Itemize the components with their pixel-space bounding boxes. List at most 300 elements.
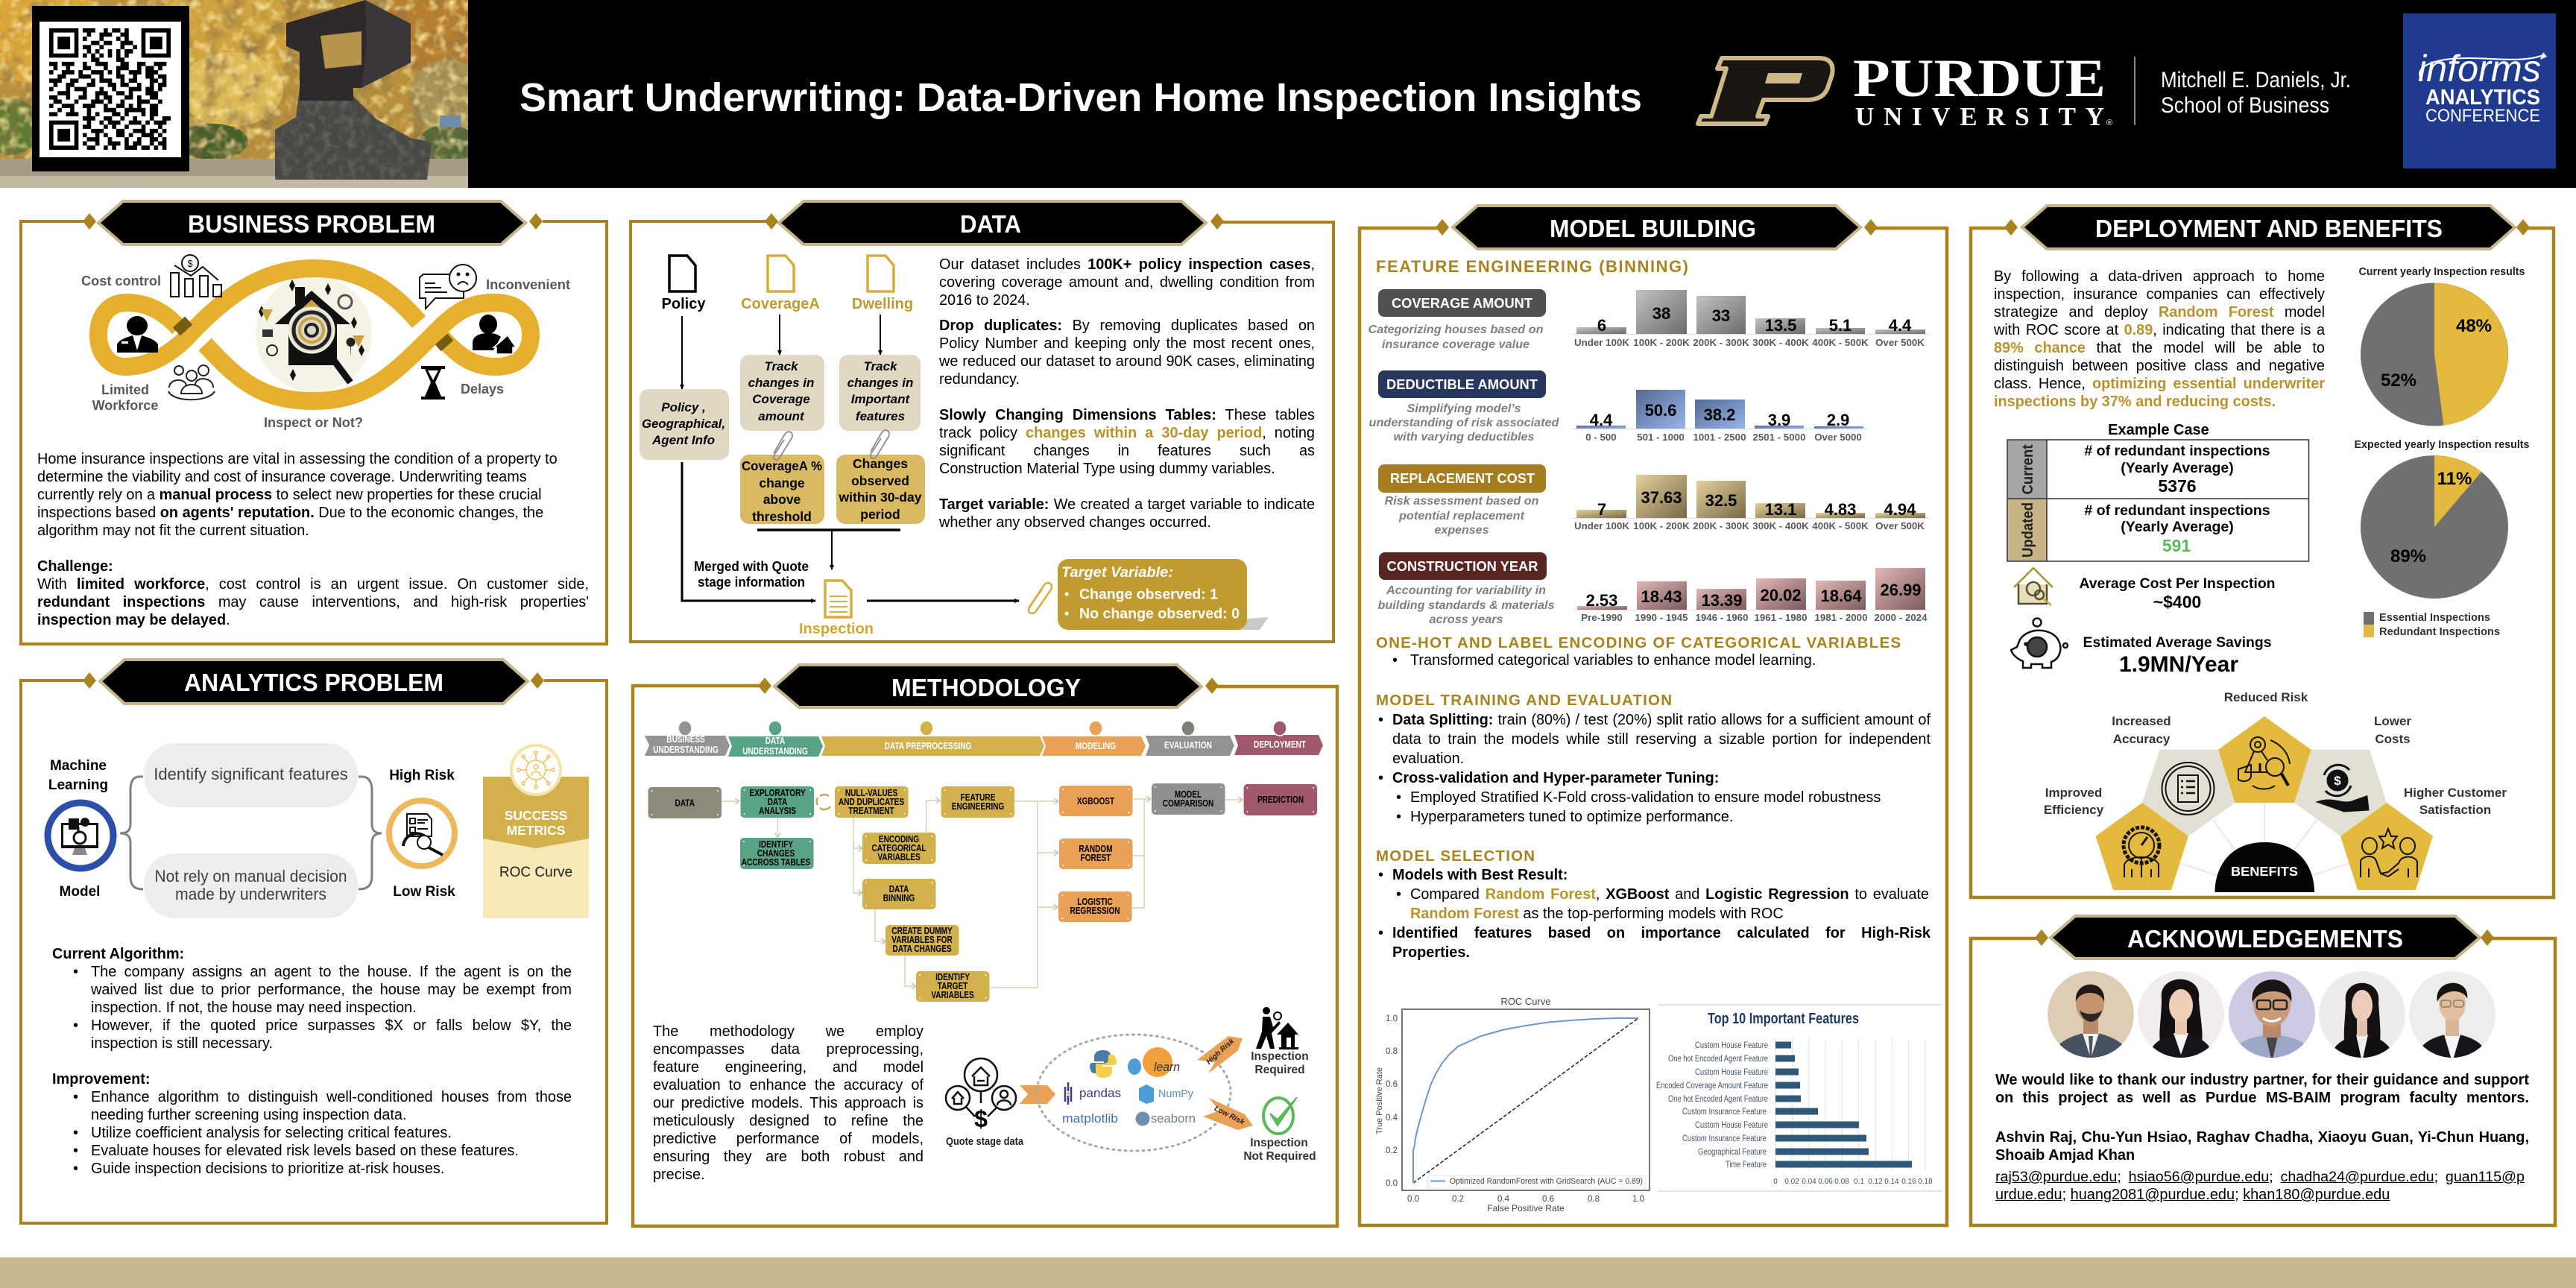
bar chart: construction year: 18.43	[1641, 587, 1682, 606]
icon: person with house	[473, 315, 516, 354]
benefit labels: Improved	[2045, 786, 2102, 800]
cost per inspection: ~$400	[2153, 592, 2201, 611]
QR code	[32, 6, 189, 171]
bar chart: coverage amount: 38	[1652, 304, 1670, 323]
authors: Shoaib Amjad Khan	[1995, 1147, 2135, 1164]
left brace	[120, 777, 143, 889]
bar chart: replacement cost: 7	[1597, 500, 1606, 519]
bar chart: replacement cost: 100K - 200K	[1633, 520, 1690, 531]
box: exploratory data analysis: EXPLORATORY	[749, 789, 806, 798]
deployment text: By following a data-driven approach to home	[1994, 268, 2325, 285]
box: identify changes: CHANGES	[757, 849, 795, 859]
portrait 4	[2319, 971, 2405, 1062]
current algorithm and improvement text: waived list due to prior performance, the house may be exempt from	[91, 982, 572, 998]
ROC curve chart: True Positive Rate	[1375, 1067, 1384, 1134]
bar chart: coverage amount: 400K - 500K	[1812, 337, 1869, 348]
panel: model building	[1360, 206, 1947, 1225]
icon: increased accuracy	[2162, 763, 2214, 815]
flow labels: Dwelling	[852, 296, 913, 312]
process phase chevrons: MODELING	[1076, 742, 1116, 751]
bar chart: coverage amount: 6	[1597, 316, 1606, 335]
bar chart: construction year: 1946 - 1960	[1696, 612, 1748, 623]
business problem text: currently rely on a manual process to select new properties for these crucial	[37, 487, 542, 503]
slowly changing dimensions text: Construction Material Type using dummy variables.	[939, 461, 1275, 477]
icon: cost chart	[171, 255, 221, 297]
example case table: 591	[2162, 536, 2191, 555]
heading: methodology: METHODOLOGY	[891, 674, 1081, 701]
box: encoding categorical variables: CATEGORICAL	[871, 844, 926, 853]
ROC curve chart: 0.0	[1407, 1195, 1419, 1204]
drop duplicates text	[939, 317, 1316, 391]
model selection text: Random Forest as the top-performing models with ROC	[1410, 906, 1784, 922]
bar chart: deductible amount: 0 - 500	[1585, 432, 1617, 443]
box: feature engineering: ENGINEERING	[952, 802, 1004, 812]
methodology text: ensuring they are both robust and	[653, 1149, 924, 1165]
heading: business problem	[83, 201, 543, 244]
deployment text: 89% chance that the model will be able to	[1994, 340, 2325, 356]
box: identify target variables: TARGET	[938, 982, 967, 991]
methodology text: predictive performance of models,	[653, 1131, 924, 1147]
icon: lower costs: $	[2334, 774, 2341, 788]
slowly changing dimensions text: track policy changes within a 30-day period, noting	[939, 425, 1315, 441]
success metrics card: METRICS	[507, 823, 565, 838]
feature importance bar chart: 0.04	[1802, 1178, 1816, 1186]
icon: executive	[117, 316, 158, 353]
current algorithm and improvement text: inspection is still necessary.	[91, 1035, 273, 1052]
ROC curve chart: 0.4	[1497, 1195, 1510, 1204]
bar chart: construction year: 1961 - 1980	[1755, 612, 1807, 623]
portrait 2	[2138, 971, 2224, 1062]
bar chart: construction year: 26.99	[1880, 581, 1922, 599]
box: create dummy variables: CREATE DUMMY	[891, 926, 953, 936]
risk output block	[389, 768, 455, 900]
bar chart: deductible amount: 2501 - 5000	[1753, 432, 1805, 443]
box: identify target variables: VARIABLES	[931, 991, 974, 1000]
pie chart: current results	[2358, 266, 2525, 426]
statue rock base	[275, 88, 432, 180]
business problem text: inspection may be delayed.	[37, 612, 230, 628]
INFORMS conference logo: ANALYTICS	[2425, 86, 2540, 110]
business problem text: inspections based on agents' reputation. Due to the economic changes, the	[37, 505, 543, 521]
box: identify changes: IDENTIFY	[759, 840, 793, 850]
model training text: Employed Stratified K-Fold cross-validation to ensure model robustness	[1410, 789, 1881, 806]
feature importance bar chart: Encoded Coverage Amount Feature	[1656, 1082, 1768, 1090]
bin group: replacement cost: Risk assessment based on	[1385, 495, 1539, 508]
target variable text: Target variable: We created a target variable to indicate	[939, 496, 1315, 513]
bin group: replacement cost: REPLACEMENT COST	[1390, 471, 1535, 486]
machine learning model block	[48, 758, 113, 900]
box: changes observed: Changes	[853, 456, 908, 471]
current algorithm and improvement text: Utilize coefficient analysis for selecting critical features.	[91, 1125, 452, 1141]
flow labels: Policy	[662, 296, 706, 312]
box: xgboost	[1059, 786, 1133, 816]
feature importance bar chart: 0.16	[1901, 1178, 1916, 1186]
heading: data: DATA	[960, 210, 1021, 238]
bar chart: coverage amount	[1572, 290, 1930, 348]
process phase chevrons: UNDERSTANDING	[742, 747, 808, 757]
flow labels	[662, 296, 913, 312]
infinity ribbon diagram	[81, 255, 570, 430]
example case table: # of redundant inspections	[2084, 443, 2270, 459]
methodology text: our predictive models. This approach is	[653, 1095, 924, 1111]
target variable text	[939, 496, 1316, 533]
footer band	[0, 1257, 2576, 1288]
icon: scikit-learn	[1128, 1047, 1180, 1077]
risk output block: High Risk	[389, 768, 455, 783]
methodology text: precise.	[653, 1167, 705, 1183]
icon: cost chart: $	[187, 258, 193, 269]
benefit labels: Higher Customer	[2404, 786, 2507, 800]
estimated savings: Estimated Average Savings	[2083, 634, 2272, 651]
icon: improved efficiency	[2124, 827, 2159, 877]
current algorithm and improvement text: •	[73, 1125, 78, 1141]
model training text: data to train the models while still reserving a sizable portion for independent	[1392, 731, 1931, 748]
heading: deployment and benefits	[2004, 206, 2530, 249]
process phase chevrons: BUSINESS	[666, 735, 705, 745]
benefit labels: Costs	[2375, 732, 2411, 746]
bin group: construction year: Accounting for variability in	[1386, 584, 1546, 597]
icon: piggy bank	[2011, 619, 2068, 668]
icon: house with magnifier	[2014, 568, 2053, 605]
model training text: Data Splitting: train (80%) / test (20%) split ratio allows for a sufficient amount of	[1392, 712, 1931, 728]
box: data binning: BINNING	[883, 894, 915, 903]
box: track features	[839, 355, 921, 431]
team portraits	[2048, 971, 2496, 1062]
Purdue University wordmark: ®	[2106, 119, 2112, 127]
icon: lower costs	[2319, 765, 2368, 811]
box: random forest: RANDOM	[1079, 845, 1113, 854]
feature importance bar chart: 0	[1773, 1178, 1778, 1186]
drop duplicates text: redundancy.	[939, 371, 1020, 388]
INFORMS conference logo: CONFERENCE	[2425, 106, 2540, 126]
icon: inspection required	[1251, 1007, 1309, 1076]
deployment text: strategize and deploy Random Forest model	[1994, 304, 2325, 321]
ROC curve chart: 0.8	[1588, 1195, 1600, 1204]
model selection text: •	[1396, 886, 1401, 903]
panel: business problem	[21, 201, 607, 644]
bin group: coverage amount: insurance coverage value	[1382, 338, 1530, 351]
bar chart: construction year: 2.53	[1586, 591, 1617, 610]
process flow connectors	[722, 799, 1243, 988]
thanks text: We would like to thank our industry partner, for their guidance and support	[1995, 1072, 2529, 1088]
slowly changing dimensions text: significant changes in features such as	[939, 443, 1315, 459]
box: changes observed: period	[860, 507, 900, 522]
bin group: construction year: building standards & materials	[1377, 599, 1555, 612]
bin group: replacement cost	[1378, 464, 1930, 537]
arrow: high risk: High Risk	[1205, 1037, 1236, 1067]
bar chart: replacement cost: 37.63	[1641, 488, 1682, 507]
heading: analytics problem: ANALYTICS PROBLEM	[184, 669, 443, 696]
heading: acknowledgements: ACKNOWLEDGEMENTS	[2127, 925, 2403, 953]
example case table	[2007, 440, 2309, 561]
feature importance bar chart: Time Feature	[1726, 1161, 1767, 1169]
ROC curve chart: 1.0	[1386, 1014, 1398, 1023]
pie chart: expected results: 89%	[2390, 546, 2426, 566]
ROC curve chart: 0.2	[1386, 1146, 1398, 1155]
box: track coverage	[740, 355, 824, 431]
success metrics card: SUCCESS	[505, 808, 567, 823]
deployment text: inspection, insurance companies can effectively	[1994, 286, 2325, 303]
box: null values treatment: NULL-VALUES	[845, 789, 898, 798]
ROC curve chart: ROC Curve	[1500, 996, 1551, 1007]
icon: inspection document: Inspection	[799, 621, 874, 637]
icon: gold paperclip	[1029, 583, 1052, 613]
panel: analytics problem	[21, 660, 607, 1223]
benefits diagram	[2044, 690, 2507, 892]
model selection text: Compared Random Forest, XGBoost and Logistic Regression to evaluate	[1410, 886, 1929, 903]
model training text: Hyperparameters tuned to optimize performance.	[1410, 809, 1733, 825]
success metrics card: ROC Curve	[499, 865, 572, 880]
campus photo with P statue	[0, 0, 499, 188]
issue labels: Inspect or Not?	[264, 415, 363, 430]
arrow: low risk	[1203, 1098, 1253, 1130]
bar chart: deductible amount: 501 - 1000	[1637, 432, 1685, 443]
box: create dummy variables: DATA CHANGES	[892, 944, 952, 954]
deployment text: inspections by 37% and reducing costs.	[1994, 394, 2276, 410]
pill: not rely on manual decision	[144, 853, 358, 918]
box: logistic regression	[1058, 891, 1131, 922]
bar chart: coverage amount: 5.1	[1829, 316, 1852, 335]
business problem text: With limited workforce, cost control is an urgent issue. On customer side,	[37, 576, 589, 593]
deployment text: with ROC score at 0.89, indicating that there is a	[1994, 322, 2325, 338]
section heading: feature engineering: FEATURE ENGINEERING (BINNING)	[1376, 257, 1688, 276]
ROC curve chart: 0.4	[1386, 1114, 1398, 1123]
current algorithm and improvement text: •	[73, 1017, 78, 1034]
merged note: Merged with Quote	[694, 559, 809, 574]
icon: workforce	[168, 365, 215, 400]
model training text: •	[1396, 809, 1401, 825]
seaborn logo: seaborn	[1151, 1111, 1196, 1126]
box: data binning	[862, 879, 936, 909]
box: create dummy variables: VARIABLES FOR	[891, 935, 953, 945]
process phase chevrons: DEPLOYMENT	[1254, 740, 1306, 750]
box: random forest: FOREST	[1081, 853, 1111, 863]
ROC curve chart	[1375, 996, 1650, 1213]
box: track coverage: Coverage	[752, 392, 810, 406]
bar chart: coverage amount: 13.5	[1765, 316, 1796, 335]
bar chart: replacement cost: 32.5	[1705, 491, 1737, 510]
pandas logo	[1065, 1082, 1121, 1105]
right brace	[359, 777, 382, 889]
data description text: 2016 to 2024.	[939, 292, 1030, 309]
machine learning model block: Machine	[50, 758, 107, 774]
icon: scikit-learn: learn	[1154, 1060, 1180, 1074]
benefits diagram: BENEFITS	[2231, 864, 2298, 879]
estimated savings	[2011, 619, 2272, 677]
process phase chevrons	[645, 721, 1323, 757]
INFORMS conference logo: informs	[2418, 48, 2541, 89]
process phase chevrons: DATA PREPROCESSING	[885, 742, 971, 751]
arrow: high risk	[1197, 1036, 1243, 1073]
issue labels: Workforce	[92, 398, 158, 413]
feature importance bar chart: Custom Insurance Feature	[1682, 1108, 1767, 1117]
bar chart: deductible amount: 1001 - 2500	[1693, 432, 1746, 443]
encoding text	[1392, 651, 1914, 671]
heading: deployment and benefits: DEPLOYMENT AND BENEFITS	[2095, 215, 2443, 242]
box: identify target variables: IDENTIFY	[935, 973, 970, 982]
model training text: •	[1378, 712, 1383, 728]
current algorithm and improvement text: •	[73, 964, 78, 980]
current algorithm and improvement text: inspection. If not, the house may need inspection.	[91, 1000, 417, 1016]
box: data: DATA	[675, 799, 695, 809]
bar chart: replacement cost	[1572, 475, 1930, 531]
pill: identify significant features	[144, 743, 358, 807]
numpy logo: NumPy	[1158, 1087, 1193, 1100]
icon: inspection not required: Inspection	[1250, 1137, 1308, 1149]
pie chart: expected results: Expected yearly Inspection results	[2354, 439, 2530, 451]
bar chart: deductible amount: 4.4	[1590, 411, 1613, 429]
box: logistic regression: LOGISTIC	[1077, 897, 1113, 907]
feature importance bar chart	[1656, 1005, 1942, 1191]
ROC curve chart: 0.6	[1386, 1080, 1398, 1089]
bin group: replacement cost: potential replacement	[1398, 510, 1525, 523]
business problem text: redundant inspections may cause interventions, and high-risk properties'	[37, 594, 589, 610]
bar chart: deductible amount: 2.9	[1827, 411, 1849, 429]
box: changes observed	[836, 455, 925, 524]
ROC curve chart: 0.0	[1386, 1179, 1398, 1188]
current algorithm and improvement text: Evaluate houses for elevated risk levels based on these features.	[91, 1143, 519, 1159]
feature importance bar chart: Top 10 Important Features	[1708, 1011, 1859, 1027]
box: policy info: Geographical,	[642, 417, 725, 431]
deployment text: class. Hence, optimizing essential underwriter	[1994, 376, 2325, 392]
risk output block: Low Risk	[393, 884, 455, 900]
deployment text	[1994, 268, 2326, 417]
statue letter P	[286, 0, 411, 101]
machine learning model block: Model	[60, 884, 100, 900]
bar chart: construction year: 18.64	[1820, 587, 1862, 605]
merged note	[694, 559, 809, 590]
process flow boxes	[648, 783, 1317, 1002]
example case table: (Yearly Average)	[2121, 460, 2234, 476]
box: coverage change: threshold	[752, 509, 812, 524]
section heading: model training: MODEL TRAINING AND EVALUATION	[1376, 692, 1672, 709]
icon: hourglass	[421, 366, 445, 400]
icon: paperclips	[774, 430, 889, 460]
model selection text: •	[1378, 925, 1383, 941]
cost per inspection: Average Cost Per Inspection	[2080, 575, 2275, 592]
box: model comparison: MODEL	[1175, 790, 1202, 800]
business problem text: Challenge:	[37, 558, 113, 575]
model selection text	[1376, 865, 1935, 965]
heading: methodology	[758, 665, 1219, 707]
icon: quote stage data: Quote stage data	[946, 1135, 1024, 1148]
model training text: •	[1396, 789, 1401, 806]
example case table: Current	[2020, 444, 2036, 495]
icon: python	[1090, 1050, 1117, 1078]
target variable text: whether any observed changes occurred.	[939, 514, 1211, 531]
model training text: •	[1378, 770, 1383, 786]
box: null values treatment: TREATMENT	[848, 806, 894, 816]
box: encoding categorical variables: VARIABLES	[877, 853, 921, 862]
current algorithm and improvement text: However, if the quoted price surpasses $X or falls below $Y, the	[91, 1017, 572, 1034]
target variable callout	[1058, 559, 1269, 630]
bar chart: coverage amount: 200K - 300K	[1693, 337, 1749, 348]
emails	[1995, 1168, 2532, 1205]
benefit labels: Increased	[2112, 714, 2171, 728]
numpy logo	[1139, 1085, 1193, 1104]
icon: unhappy feedback	[420, 265, 476, 309]
current algorithm and improvement text: Enhance algorithm to distinguish well-conditioned houses from those	[91, 1089, 572, 1105]
bar chart: replacement cost: 4.83	[1825, 500, 1856, 519]
machine learning model block: Learning	[48, 777, 108, 793]
bar chart: deductible amount: 3.9	[1768, 411, 1790, 429]
drop duplicates text: Drop duplicates: By removing duplicates based on	[939, 318, 1315, 334]
target variable callout: Change observed: 1	[1079, 587, 1218, 602]
process phase chevrons: EVALUATION	[1164, 741, 1212, 751]
feature importance bar chart: 0.18	[1918, 1178, 1933, 1186]
model training text	[1376, 710, 1935, 830]
box: model comparison: COMPARISON	[1163, 799, 1213, 809]
box: identify target variables	[916, 971, 990, 1002]
box: feature engineering	[941, 786, 1014, 818]
pie chart: current results: 48%	[2456, 316, 2492, 336]
pie legend	[2364, 612, 2500, 638]
benefit labels	[2044, 690, 2507, 817]
estimated savings: 1.9MN/Year	[2119, 652, 2238, 677]
icon: policy document	[669, 256, 695, 291]
pie legend: Essential Inspections	[2379, 612, 2490, 624]
methodology text	[653, 1023, 925, 1187]
box: coverage change: above	[763, 492, 801, 507]
bin group: replacement cost: expenses	[1435, 524, 1489, 537]
benefit labels: Efficiency	[2044, 803, 2104, 817]
school name	[2161, 68, 2351, 118]
section heading: model selection: MODEL SELECTION	[1376, 847, 1535, 865]
bar chart: replacement cost: 300K - 400K	[1752, 520, 1809, 531]
success metrics card	[483, 745, 589, 918]
bar chart: coverage amount: Over 500K	[1875, 337, 1925, 348]
title: Smart Underwriting: Data-Driven Home Inspection Insights	[520, 75, 1642, 120]
benefit labels: Accuracy	[2113, 732, 2171, 746]
bin group: coverage amount	[1368, 289, 1930, 351]
bin group: deductible amount: with varying deductibles	[1394, 431, 1535, 443]
icon: house under magnifier	[259, 280, 364, 382]
icon: coverageA document	[768, 256, 794, 291]
emails: urdue.edu; huang2081@purdue.edu; khan180@purdue.edu	[1995, 1187, 2390, 1203]
icon: dwelling document	[868, 256, 894, 291]
data description text: Our dataset includes 100K+ policy inspection cases,	[939, 256, 1315, 273]
current algorithm and improvement text: Current Algorithm:	[52, 946, 184, 962]
current algorithm and improvement text: The company assigns an agent to the house. If the agent is on the	[91, 964, 572, 980]
heading: model building	[1436, 206, 1878, 249]
model training text: evaluation.	[1392, 751, 1464, 767]
encoding text: Transformed categorical variables to enhance model learning.	[1410, 652, 1816, 669]
pie chart: expected results	[2354, 439, 2530, 599]
box: data binning: DATA	[889, 885, 909, 894]
panel: deployment and benefits	[1971, 206, 2554, 897]
bar chart: replacement cost: Over 500K	[1875, 520, 1925, 531]
bin group: deductible amount: Simplifying model’s	[1407, 402, 1521, 415]
icon: quote stage data	[946, 1058, 1024, 1148]
slowly changing dimensions text	[939, 406, 1316, 481]
box: track coverage: amount	[758, 409, 805, 423]
pie chart: current results: Current yearly Inspection results	[2358, 266, 2525, 278]
benefit labels: Reduced Risk	[2224, 690, 2308, 704]
school name: Mitchell E. Daniels, Jr.	[2161, 68, 2351, 92]
bar chart: coverage amount: 33	[1712, 306, 1730, 325]
Purdue University wordmark: UNIVERSITY	[1855, 102, 2104, 131]
box: exploratory data analysis	[741, 786, 814, 818]
issue labels: Cost control	[81, 274, 161, 288]
box: track features: changes in	[847, 376, 913, 390]
flow arrows	[682, 315, 1019, 601]
pill: not rely on manual decision: made by underwriters	[175, 885, 326, 903]
bar chart: replacement cost: 200K - 300K	[1693, 520, 1749, 531]
bin group: construction year	[1377, 552, 1930, 626]
box: track features: Important	[851, 392, 911, 406]
thanks text: on this project as well as Purdue MS-BAIM program faculty mentors.	[1995, 1090, 2529, 1106]
bar chart: construction year: 1990 - 1945	[1635, 612, 1688, 623]
